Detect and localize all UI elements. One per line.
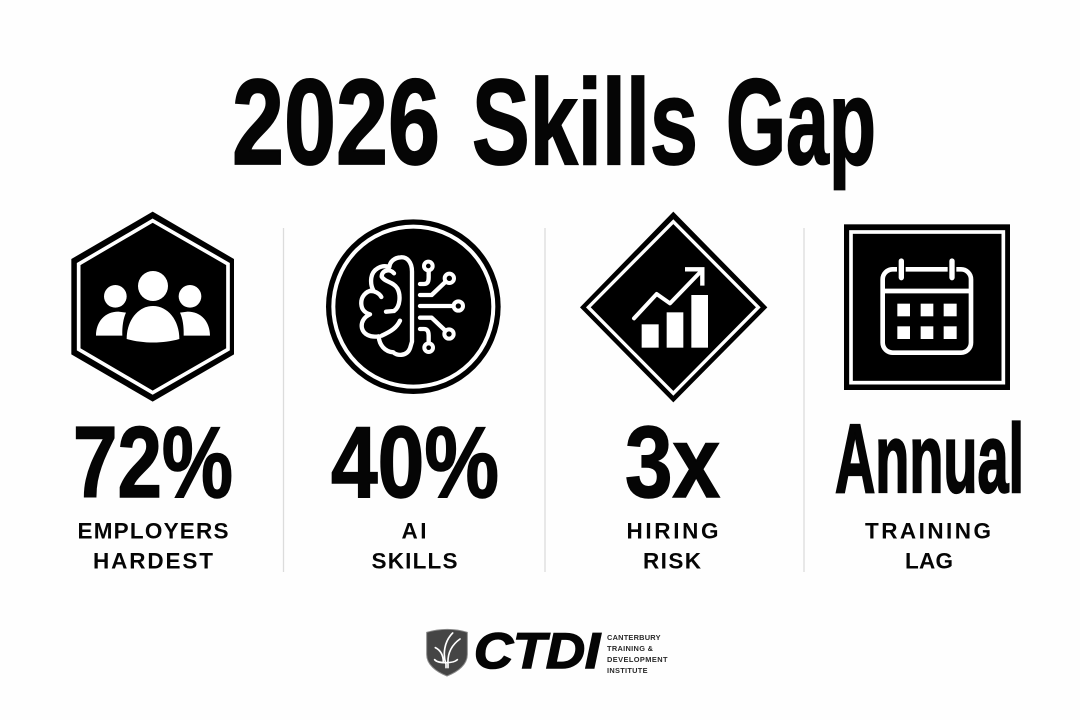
title [232,54,876,190]
institute name: CANTERBURY [607,633,661,642]
stat: 3x: 3x [625,407,720,519]
stat: 40%: 40% [331,407,499,519]
panel: hiring risk [580,212,767,574]
institute name [607,633,668,675]
label: AI skills: AI [402,518,426,544]
icon: calendar in square [844,224,1010,390]
label: employers hardest: HARDEST [93,548,213,574]
institute name: INSTITUTE [607,666,648,675]
institute name: DEVELOPMENT [607,655,668,664]
icon: people in hexagon [71,212,234,402]
label: employers hardest: EMPLOYERS [78,518,228,544]
title: Skills [472,54,698,190]
panel: AI skills [326,219,501,574]
label: training lag [865,518,991,574]
title: Gap [726,54,876,190]
label: AI skills [372,518,458,574]
wordmark: CTDI [474,623,601,679]
panel: training lag [835,224,1024,574]
label: training lag: LAG [905,548,953,574]
title: 2026 [232,54,440,190]
institute name: TRAINING & [607,644,654,653]
icon: shield [427,629,467,676]
label: hiring risk: HIRING [626,518,718,544]
panel: employers [71,212,234,574]
logo: CTDI [427,623,668,679]
icon: brain in circle [326,219,501,394]
label: training lag: TRAINING [865,518,991,544]
label: hiring risk: RISK [643,548,702,574]
label: employers hardest [78,518,228,574]
label: hiring risk [626,518,718,574]
label: AI skills: SKILLS [372,548,458,574]
icon: growth chart in diamond [580,212,767,402]
stat: 72%: 72% [73,407,233,519]
